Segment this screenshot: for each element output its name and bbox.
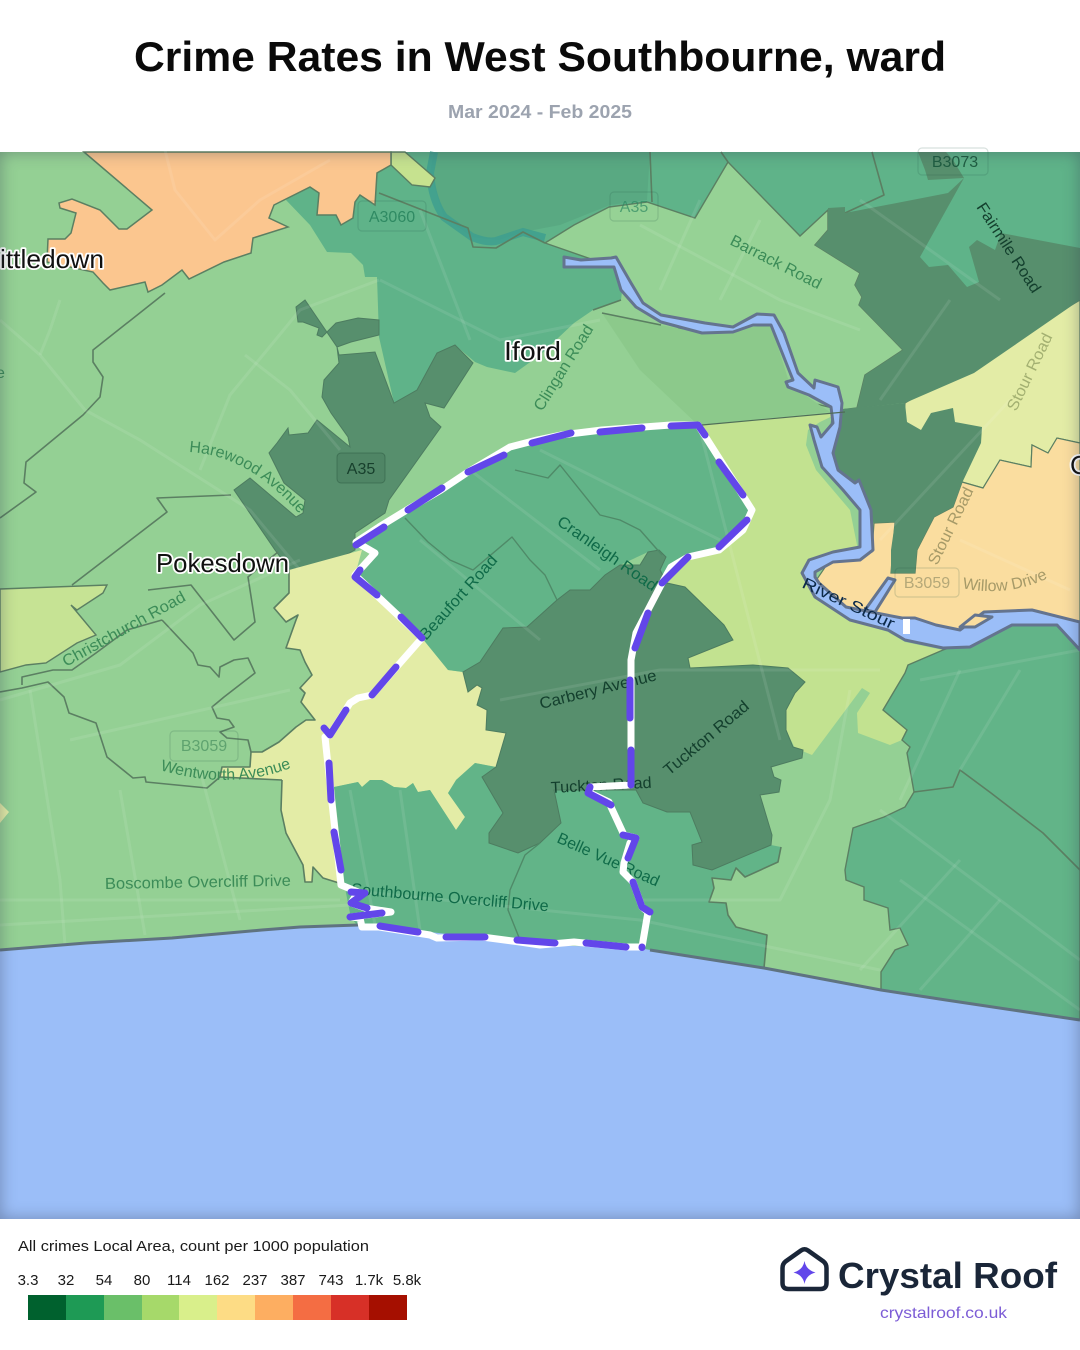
title: Crime Rates in West Southbourne, ward [134, 33, 946, 80]
road shields: A35 [620, 199, 648, 216]
legend tick labels: 237 [242, 1272, 268, 1289]
area: Littledown orange [47, 152, 391, 292]
road shields: B3059 [181, 738, 227, 755]
road labels: Boscombe Overcliff Drive [105, 873, 291, 893]
area: Wick light orange [815, 438, 1080, 634]
area: east dark block [828, 403, 982, 573]
area: Barrack Road light green [545, 162, 903, 410]
left boundaries [0, 293, 278, 788]
road labels: Fairmile Road [973, 200, 1044, 296]
place labels: Iford [504, 336, 561, 366]
legend tick labels: 5.8k [393, 1272, 422, 1289]
legend tick labels: 387 [280, 1272, 306, 1289]
road labels: Belle Vue Road [554, 830, 662, 890]
road labels: Wentworth Avenue [162, 760, 290, 780]
area: ward north medium [355, 425, 752, 672]
legend tick labels: 1.7k [355, 1272, 384, 1289]
legend tick labels: 32 [58, 1272, 74, 1289]
road labels: Carbery Avenue [538, 667, 658, 713]
road shields: A3060 [369, 209, 415, 226]
icon: house with star [782, 1249, 826, 1289]
internal ward boundaries [405, 465, 662, 940]
legend tick labels: 3.3 [18, 1272, 38, 1289]
road shields [170, 148, 988, 761]
river Stour [564, 257, 1080, 650]
choropleth map [0, 147, 1080, 1219]
logo wordmark: Crystal Roof [838, 1255, 1058, 1296]
place labels: Pokesdown [156, 548, 289, 578]
road labels: Stour Road [925, 485, 977, 568]
road labels: Southbourne Overcliff Drive [351, 881, 549, 915]
road labels: Barrack Road [727, 232, 824, 293]
road shields: B3059 [904, 575, 950, 592]
area: northern medium-crime zone [286, 152, 1080, 403]
road network [0, 150, 1080, 1010]
road labels: Stour Road [1004, 331, 1056, 414]
area: east yellow-green [667, 412, 943, 755]
legend [18, 1238, 422, 1320]
area: east of river south light green [602, 313, 830, 425]
area: far left pale green [0, 585, 107, 672]
road labels: Cranleigh Road [554, 513, 660, 595]
subtitle: date range: Mar 2024 - Feb 2025 [448, 102, 632, 122]
area: west pale yellow [220, 550, 506, 883]
road shields: A35 [347, 461, 375, 478]
coastline [0, 925, 358, 950]
area: pale green patch north [391, 152, 435, 187]
legend tick labels [18, 1272, 422, 1289]
logo URL: crystalroof.co.uk [880, 1305, 1008, 1322]
area: west dark block near A35 [234, 300, 473, 570]
area: south-east medium [845, 625, 1080, 1022]
road labels: Clingan Road [531, 322, 597, 414]
sea [0, 925, 1080, 1219]
road labels: Harewood Avenue [190, 441, 304, 512]
area: Stour Road pale [900, 300, 1080, 488]
logo: Crystal Roof [782, 1249, 1058, 1322]
ward boundary: West Southbourne [324, 425, 752, 948]
area: north-east dark block [815, 152, 1080, 408]
road labels: Tuckton Road [661, 698, 753, 779]
area: Carbery / Tuckton dark block [463, 550, 805, 870]
road labels: Christchurch Road [60, 589, 189, 670]
road shields: B3073 [932, 154, 978, 171]
place labels: ittledown [0, 244, 104, 274]
legend tick labels: 114 [167, 1272, 191, 1289]
area: ward south medium [334, 763, 781, 968]
place labels [0, 244, 1080, 578]
road labels: Tuckton Road [550, 775, 652, 797]
legend tick labels: 162 [204, 1272, 230, 1289]
road labels [0, 200, 1056, 916]
legend tick labels: 80 [134, 1272, 150, 1289]
legend tick labels: 743 [318, 1272, 344, 1289]
legend tick labels: 54 [96, 1272, 112, 1289]
legend title: All crimes Local Area, count per 1000 population [18, 1238, 369, 1255]
road labels: Beaufort Road [416, 552, 501, 644]
legend colour scale [28, 1295, 407, 1320]
road labels: River Stour [799, 575, 898, 633]
road labels: Willow Drive [964, 572, 1046, 592]
